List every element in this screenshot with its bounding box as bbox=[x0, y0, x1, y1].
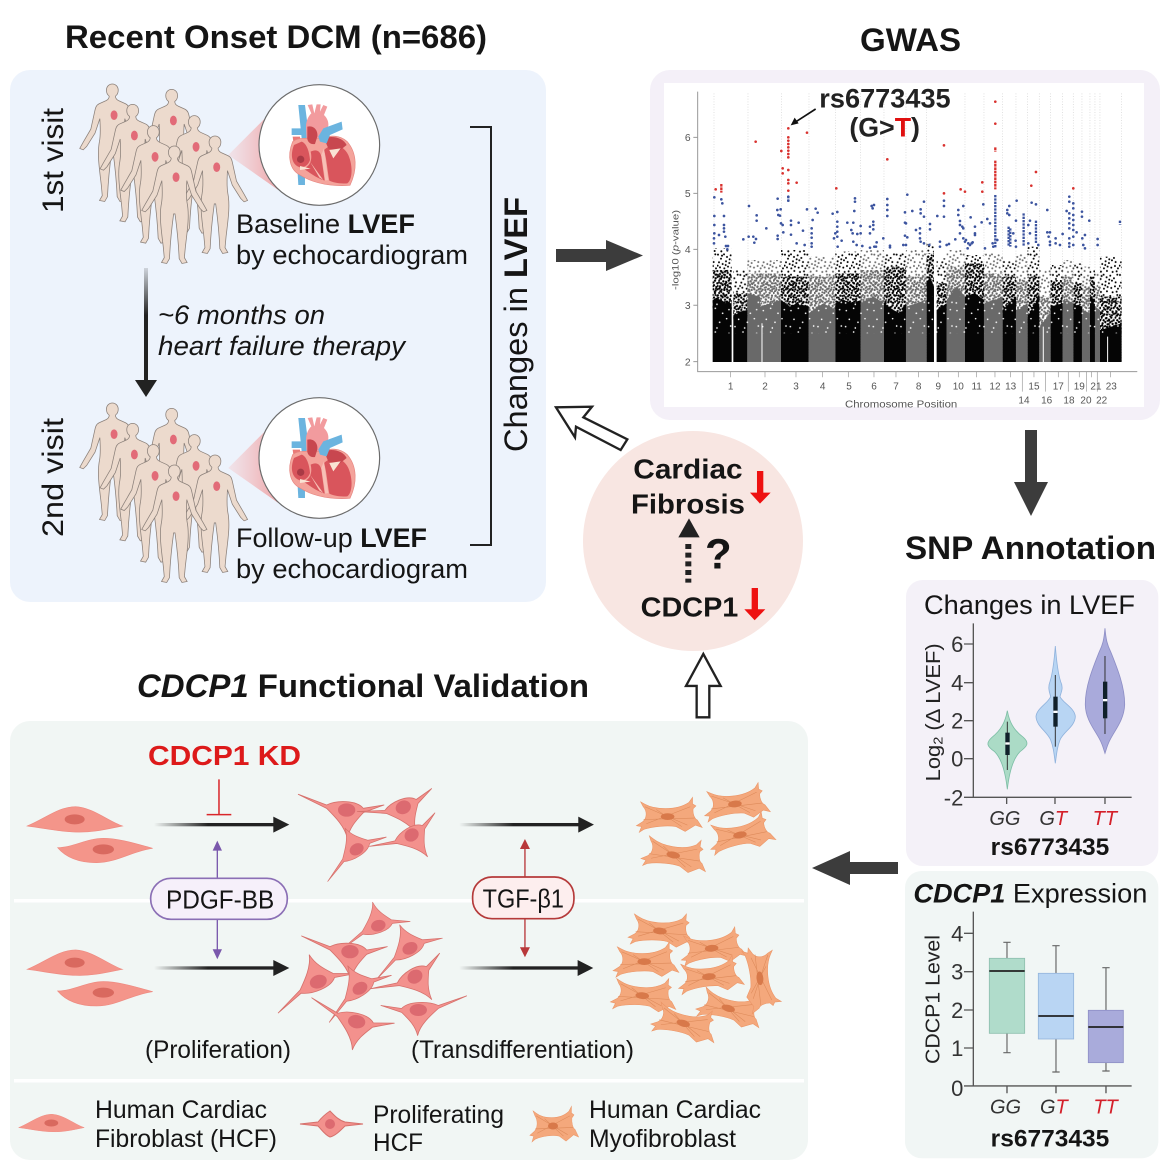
axes and labels: 3 bbox=[793, 381, 799, 392]
text: by echocardiogram: by echocardiogram bbox=[236, 240, 468, 270]
axes: 2 bbox=[951, 709, 963, 734]
annotation: rs6773435 bbox=[791, 83, 951, 143]
axes and labels: 11 bbox=[971, 381, 982, 392]
text: by echocardiogram second: by echocardiogram bbox=[236, 554, 468, 584]
axes and labels: 4 bbox=[685, 245, 691, 256]
legend: human cardiac myofibroblast: Human Cardiac bbox=[589, 1096, 761, 1124]
text: cardiac fibrosis: Cardiac bbox=[633, 453, 743, 484]
axes and labels: 5 bbox=[685, 189, 691, 200]
axes and labels: 16 bbox=[1041, 396, 1053, 407]
cells: row two proliferating bbox=[263, 894, 467, 1056]
heading: changes in LVEF: Changes in LVEF bbox=[924, 590, 1135, 620]
axes and labels bbox=[671, 92, 1137, 411]
arrow: hollow up to circle bbox=[686, 654, 721, 717]
axes and labels: -log10 (p-value) bbox=[671, 210, 681, 290]
icon: heart callout first visit bbox=[228, 85, 380, 205]
signal: TGF-β1: TGF-β1 bbox=[483, 884, 564, 914]
axes bbox=[922, 912, 1132, 1153]
text: therapy duration: ~6 months on bbox=[158, 300, 325, 330]
title: Recent Onset DCM: Recent Onset DCM (n=686) bbox=[65, 19, 487, 55]
axes: TT bbox=[1093, 808, 1119, 830]
axes and labels: 17 bbox=[1053, 381, 1064, 392]
box: GT bbox=[1038, 946, 1074, 1072]
axes and labels: 8 bbox=[916, 381, 922, 392]
axes and labels: 12 bbox=[989, 381, 1001, 392]
axes: CDCP1 Level bbox=[922, 935, 944, 1064]
signal: PDGF-BB bbox=[151, 841, 287, 959]
text: CDCP1 KD: CDCP1 KD bbox=[148, 740, 301, 771]
axes: GG bbox=[989, 808, 1020, 830]
violin: GT bbox=[1036, 646, 1075, 763]
axes and labels: 3 bbox=[685, 301, 691, 312]
icon: red down arrow fibrosis bbox=[750, 471, 771, 504]
text: changes in LVEF: Changes in LVEF bbox=[498, 197, 534, 452]
axes: 2 bbox=[931, 737, 946, 745]
violin: TT bbox=[1085, 628, 1125, 753]
legend: human cardiac myofibroblast bbox=[530, 1096, 761, 1153]
text: cardiac fibrosis: Fibrosis bbox=[631, 488, 745, 519]
axes bbox=[923, 623, 1132, 861]
violin: GG bbox=[988, 711, 1027, 789]
label: proliferation: (Proliferation) bbox=[145, 1036, 291, 1064]
text: 2nd visit: 2nd visit bbox=[37, 417, 70, 537]
panel: violin plot changes in LVEF bbox=[906, 580, 1158, 866]
axes and labels: 6 bbox=[685, 133, 691, 144]
text: 1st visit: 1st visit bbox=[37, 107, 70, 213]
axes and labels: Chromosome Position bbox=[845, 400, 958, 411]
legend: proliferating HCF: HCF bbox=[373, 1129, 423, 1157]
cells: row one fibroblasts bbox=[27, 807, 153, 863]
axes: 6 bbox=[951, 632, 963, 657]
axes and labels: 13 bbox=[1005, 381, 1017, 392]
icon: patient group first visit bbox=[80, 84, 248, 264]
axes: 1 bbox=[951, 1036, 963, 1061]
axes and labels: 18 bbox=[1063, 396, 1075, 407]
arrow: row two second step bbox=[459, 960, 593, 976]
text: therapy duration bbox=[158, 300, 407, 361]
title: GWAS: GWAS bbox=[860, 22, 961, 58]
axes: (Δ LVEF) bbox=[923, 643, 945, 737]
legend: human cardiac fibroblast bbox=[19, 1096, 277, 1153]
text: baseline LVEF: Baseline LVEF bbox=[236, 209, 415, 239]
axes and labels: 5 bbox=[846, 381, 852, 392]
legend: human cardiac myofibroblast: Myofibroblast bbox=[589, 1125, 736, 1153]
signal: TGF-β1 bbox=[473, 839, 574, 957]
title: CDCP1 Functional Validation: CDCP1 Functional Validation bbox=[137, 668, 589, 704]
axes and labels: 23 bbox=[1106, 381, 1117, 392]
arrow: hollow to changes in LVEF bbox=[556, 407, 627, 450]
axes and labels: 15 bbox=[1028, 381, 1040, 392]
panel: box plot CDCP1 expression bbox=[905, 871, 1158, 1158]
axes: rs6773435 bbox=[991, 834, 1109, 861]
heading: CDCP1 expression: CDCP1 Expression bbox=[913, 878, 1147, 908]
legend: human cardiac fibroblast: Fibroblast (HCF) bbox=[95, 1125, 277, 1153]
axes and labels: 10 bbox=[953, 381, 964, 392]
axes and labels: 22 bbox=[1096, 396, 1108, 407]
arrow: row one second step bbox=[459, 817, 594, 833]
cells: row one proliferating bbox=[298, 779, 453, 881]
arrow: SNP annotation to validation bbox=[812, 851, 898, 885]
arrow: GWAS to SNP annotation bbox=[1014, 430, 1048, 516]
icon: red down arrow CDCP1 bbox=[744, 588, 765, 620]
axes and labels: 21 bbox=[1090, 381, 1102, 392]
axes: GT bbox=[1039, 808, 1069, 830]
icon: patient group second visit bbox=[80, 403, 248, 583]
text: therapy duration: heart failure therapy bbox=[158, 331, 407, 361]
axes: -2 bbox=[944, 785, 963, 810]
axes: 3 bbox=[951, 960, 963, 985]
title: SNP Annotation: SNP Annotation bbox=[905, 530, 1156, 566]
text: follow-up LVEF: Follow-up LVEF bbox=[236, 523, 427, 553]
axes: 0 bbox=[951, 747, 963, 772]
axes: GG bbox=[990, 1096, 1021, 1118]
arrow: dotted up bbox=[678, 518, 700, 583]
axes: GT bbox=[1040, 1096, 1070, 1118]
axes and labels: 4 bbox=[820, 381, 826, 392]
label: transdifferentiation: (Transdifferentiation) bbox=[411, 1036, 634, 1064]
icon: heart callout second visit bbox=[228, 398, 380, 518]
axes: 4 bbox=[951, 921, 963, 946]
axes and labels: 2 bbox=[762, 381, 768, 392]
axes and labels: 1 bbox=[728, 381, 734, 392]
arrow: between visits bbox=[135, 268, 157, 397]
legend: human cardiac fibroblast: Human Cardiac bbox=[95, 1096, 267, 1124]
bracket bbox=[470, 127, 491, 545]
arrow: row one first step bbox=[154, 817, 289, 833]
text: cardiac fibrosis bbox=[631, 453, 745, 519]
cells: row two fibroblasts bbox=[27, 950, 153, 1006]
panel: functional validation bbox=[10, 721, 808, 1160]
axes: 0 bbox=[951, 1076, 963, 1101]
axes: 4 bbox=[951, 671, 963, 696]
annotation: rs6773435: rs6773435 bbox=[819, 83, 951, 113]
text: question mark: ? bbox=[705, 530, 732, 578]
axes and labels: 20 bbox=[1080, 396, 1092, 407]
axes and labels: 7 bbox=[893, 381, 899, 392]
arrow: row two first step bbox=[154, 960, 289, 976]
panel: cardiac fibrosis circle bbox=[583, 431, 803, 651]
panel: patient cohort and LVEF visits bbox=[10, 70, 546, 602]
axes and labels: 19 bbox=[1074, 381, 1085, 392]
cells: row two myofibroblasts bbox=[610, 909, 782, 1047]
inhibition mark bbox=[207, 779, 231, 815]
signal: PDGF-BB: PDGF-BB bbox=[166, 884, 274, 914]
axes and labels: 9 bbox=[936, 381, 942, 392]
box: GG bbox=[989, 942, 1025, 1053]
panel: GWAS Manhattan plot bbox=[650, 70, 1160, 420]
axes and labels: 14 bbox=[1018, 396, 1030, 407]
legend: proliferating HCF: Proliferating bbox=[373, 1101, 504, 1129]
legend: proliferating HCF bbox=[300, 1101, 504, 1157]
axes: rs6773435 bbox=[991, 1126, 1109, 1153]
cells: row one myofibroblasts bbox=[636, 782, 777, 876]
annotation: rs6773435: (G>T) bbox=[849, 113, 920, 143]
text: CDCP1: CDCP1 bbox=[641, 592, 738, 623]
axes: 2 bbox=[951, 998, 963, 1023]
axes: Log bbox=[923, 748, 945, 781]
axes and labels: 2 bbox=[685, 357, 691, 368]
axes and labels: 6 bbox=[871, 381, 877, 392]
axes: TT bbox=[1093, 1096, 1120, 1118]
arrow: LVEF to GWAS bbox=[556, 240, 643, 271]
box: TT bbox=[1088, 968, 1123, 1071]
chart: Manhattan scatter bbox=[713, 102, 1122, 362]
